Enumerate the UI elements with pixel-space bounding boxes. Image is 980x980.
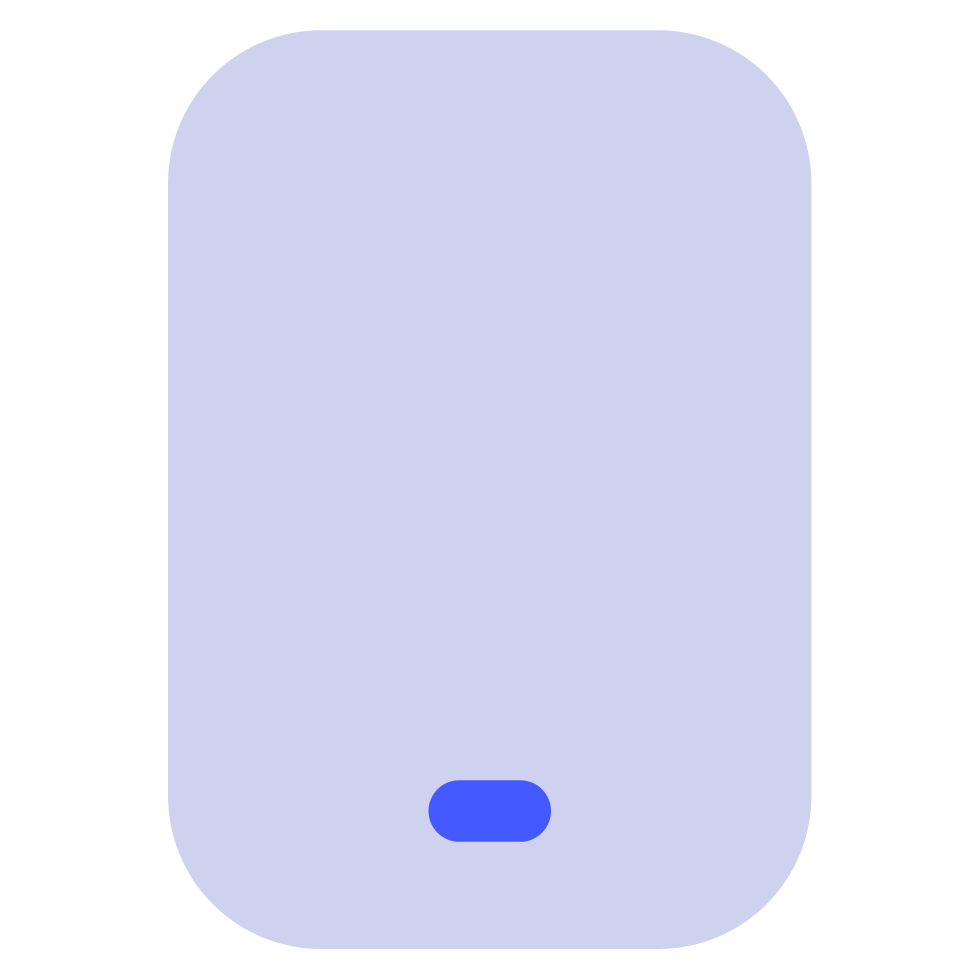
home button [428, 780, 551, 842]
phone body [168, 30, 811, 949]
